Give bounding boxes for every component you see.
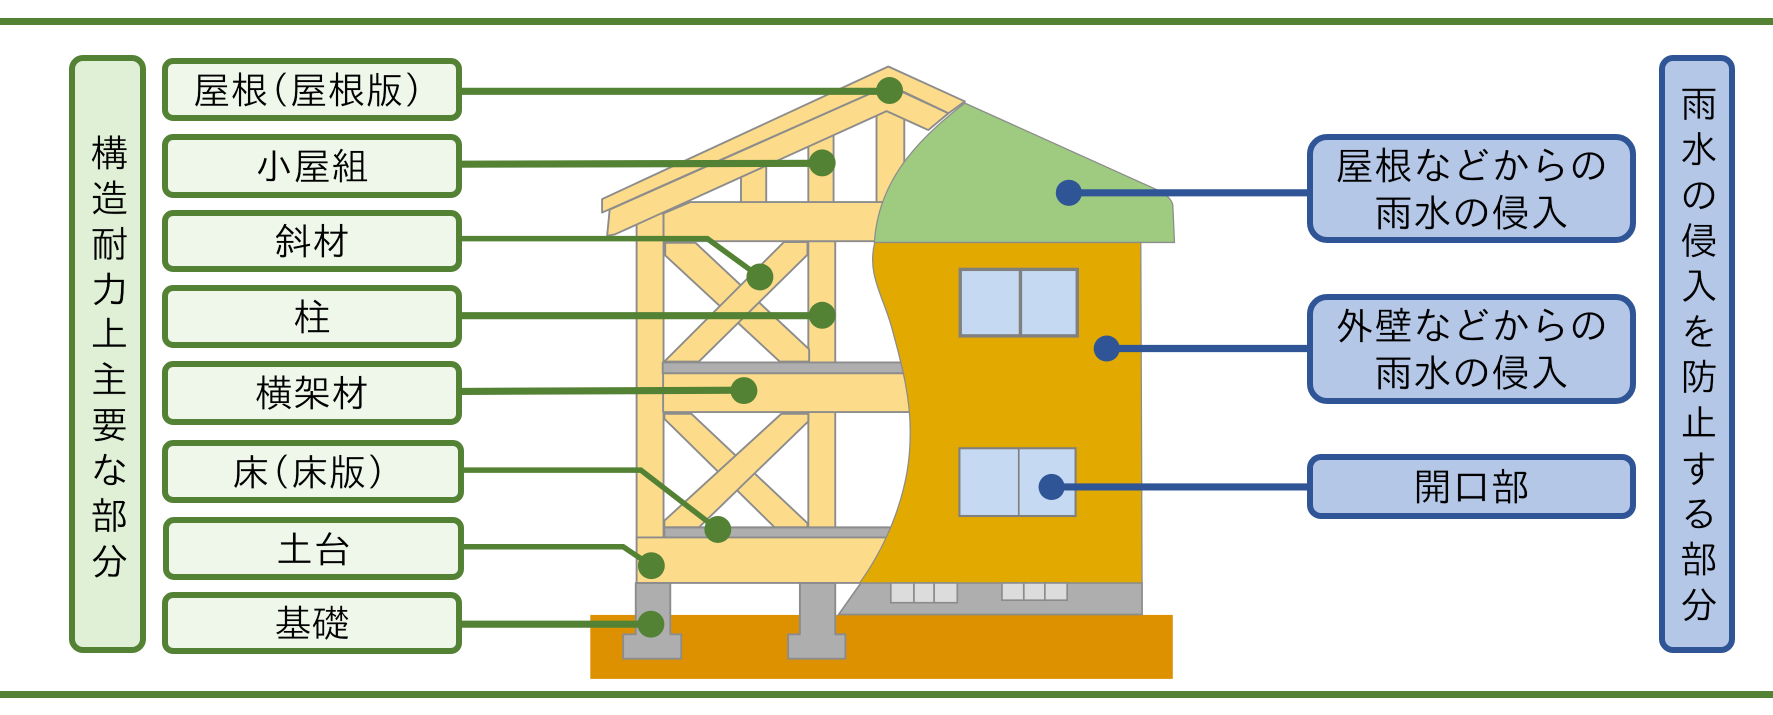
callout: 外壁などからの雨水の侵入 xyxy=(1307,294,1636,404)
label: 土台 xyxy=(163,517,464,580)
bottom rule xyxy=(0,691,1773,698)
right heading panel xyxy=(1659,55,1735,653)
label: 屋根(屋根版) xyxy=(162,58,462,121)
ground xyxy=(590,615,1173,679)
upper window xyxy=(960,269,1077,336)
label: 基礎: 基礎 xyxy=(274,604,350,646)
callout: 屋根などからの雨水の侵入 xyxy=(1307,134,1636,243)
exterior wall xyxy=(860,242,1142,583)
left heading panel xyxy=(69,55,146,653)
upper beam xyxy=(664,202,892,241)
upper diagonals xyxy=(665,243,809,362)
label: 床(床版): 床（床版） xyxy=(232,452,404,494)
label: 横架材: 横架材 xyxy=(255,374,369,416)
label: 斜材 xyxy=(162,210,462,272)
right post xyxy=(808,241,835,532)
callout: 外壁などからの雨水の侵入: 雨水の侵入 xyxy=(1374,353,1569,396)
label: 小屋組: 小屋組 xyxy=(255,147,369,189)
label: 土台: 土台 xyxy=(276,530,352,572)
label: 柱: 柱 xyxy=(293,298,331,340)
lower rafter xyxy=(607,85,948,236)
left heading panel: 構造耐力上主要な部分 xyxy=(86,132,128,586)
finished roof xyxy=(874,103,1174,242)
sill xyxy=(637,537,898,583)
top rule xyxy=(0,18,1773,25)
upper rafter xyxy=(602,67,965,213)
right heading panel: 雨水の侵入を防止する部分 xyxy=(1676,84,1718,630)
callout: 開口部: 開口部 xyxy=(1413,467,1530,510)
lower window xyxy=(959,448,1076,516)
wooden frame xyxy=(602,67,965,659)
label: 柱 xyxy=(162,285,462,348)
left post xyxy=(637,213,664,540)
green leader lines and dots xyxy=(461,77,903,638)
callout: 屋根などからの雨水の侵入: 雨水の侵入 xyxy=(1374,192,1569,236)
foundation vents xyxy=(891,583,1067,603)
label: 小屋組 xyxy=(162,134,462,198)
blue leader lines and dots xyxy=(1039,180,1308,500)
concrete piers xyxy=(623,583,845,659)
attic posts xyxy=(741,166,766,203)
callout: 外壁などからの雨水の侵入: 外壁などからの xyxy=(1335,306,1608,349)
foundation wall xyxy=(839,583,1142,615)
mid beam xyxy=(663,373,916,412)
callout: 屋根などからの雨水の侵入: 屋根などからの xyxy=(1335,146,1608,188)
label: 横架材 xyxy=(162,361,462,425)
label: 斜材: 斜材 xyxy=(274,222,350,264)
callout: 開口部 xyxy=(1307,454,1636,519)
label: 基礎 xyxy=(162,592,462,654)
label: 屋根(屋根版): 屋根（屋根版） xyxy=(192,70,442,112)
lower diagonals xyxy=(664,414,807,527)
label: 床(床版) xyxy=(162,440,464,503)
floor slabs xyxy=(663,362,907,537)
